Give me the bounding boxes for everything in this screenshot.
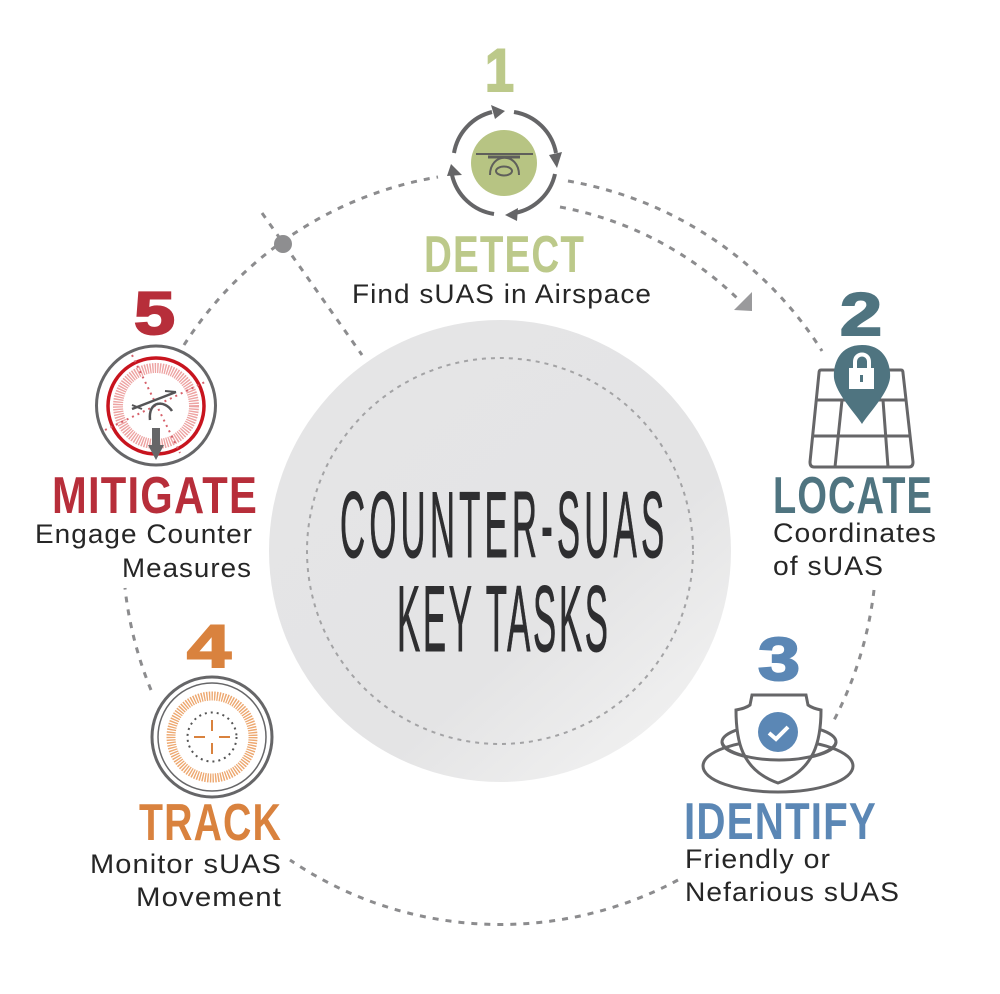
step 1: detect <box>352 37 652 309</box>
icon: drone in rotating arrows <box>447 105 562 221</box>
heading: TRACK <box>139 794 282 852</box>
heading: IDENTIFY <box>684 793 877 851</box>
step 4: track <box>90 613 282 912</box>
description <box>773 518 937 581</box>
number 4: 4 <box>187 613 232 680</box>
number 2: 2 <box>840 281 882 348</box>
icon: map pin with lock <box>810 345 913 467</box>
dashed cycle ring <box>125 177 874 924</box>
title: KEY TASKS <box>397 567 608 672</box>
description <box>685 844 900 907</box>
icon: tracking reticle <box>152 677 272 797</box>
arrow: inner progress arrow <box>734 292 752 311</box>
marker dot <box>274 235 292 253</box>
number 1: 1 <box>485 37 514 104</box>
title <box>340 473 664 672</box>
number 3: 3 <box>758 626 800 693</box>
number 5: 5 <box>134 280 175 347</box>
heading: MITIGATE <box>52 467 258 525</box>
title: COUNTER-SUAS <box>340 473 664 578</box>
step 2: locate <box>773 281 937 581</box>
description: Monitor sUAS <box>90 849 282 879</box>
description: Measures <box>122 553 252 583</box>
step 5: mitigate <box>35 280 258 583</box>
description: Engage Counter <box>35 519 253 549</box>
icon: shield with check <box>703 695 853 792</box>
description <box>35 519 253 583</box>
description: Movement <box>136 882 282 912</box>
heading: DETECT <box>424 226 585 284</box>
description: Coordinates <box>773 518 937 548</box>
description: of sUAS <box>773 551 884 581</box>
icon: drone in target with down arrow <box>96 346 216 465</box>
panel: central circle <box>269 320 731 782</box>
step 3: identify <box>684 626 900 907</box>
description: Nefarious sUAS <box>685 877 900 907</box>
description <box>90 849 282 912</box>
description: Friendly or <box>685 844 831 874</box>
heading: LOCATE <box>773 467 933 525</box>
description: Find sUAS in Airspace <box>352 279 652 309</box>
